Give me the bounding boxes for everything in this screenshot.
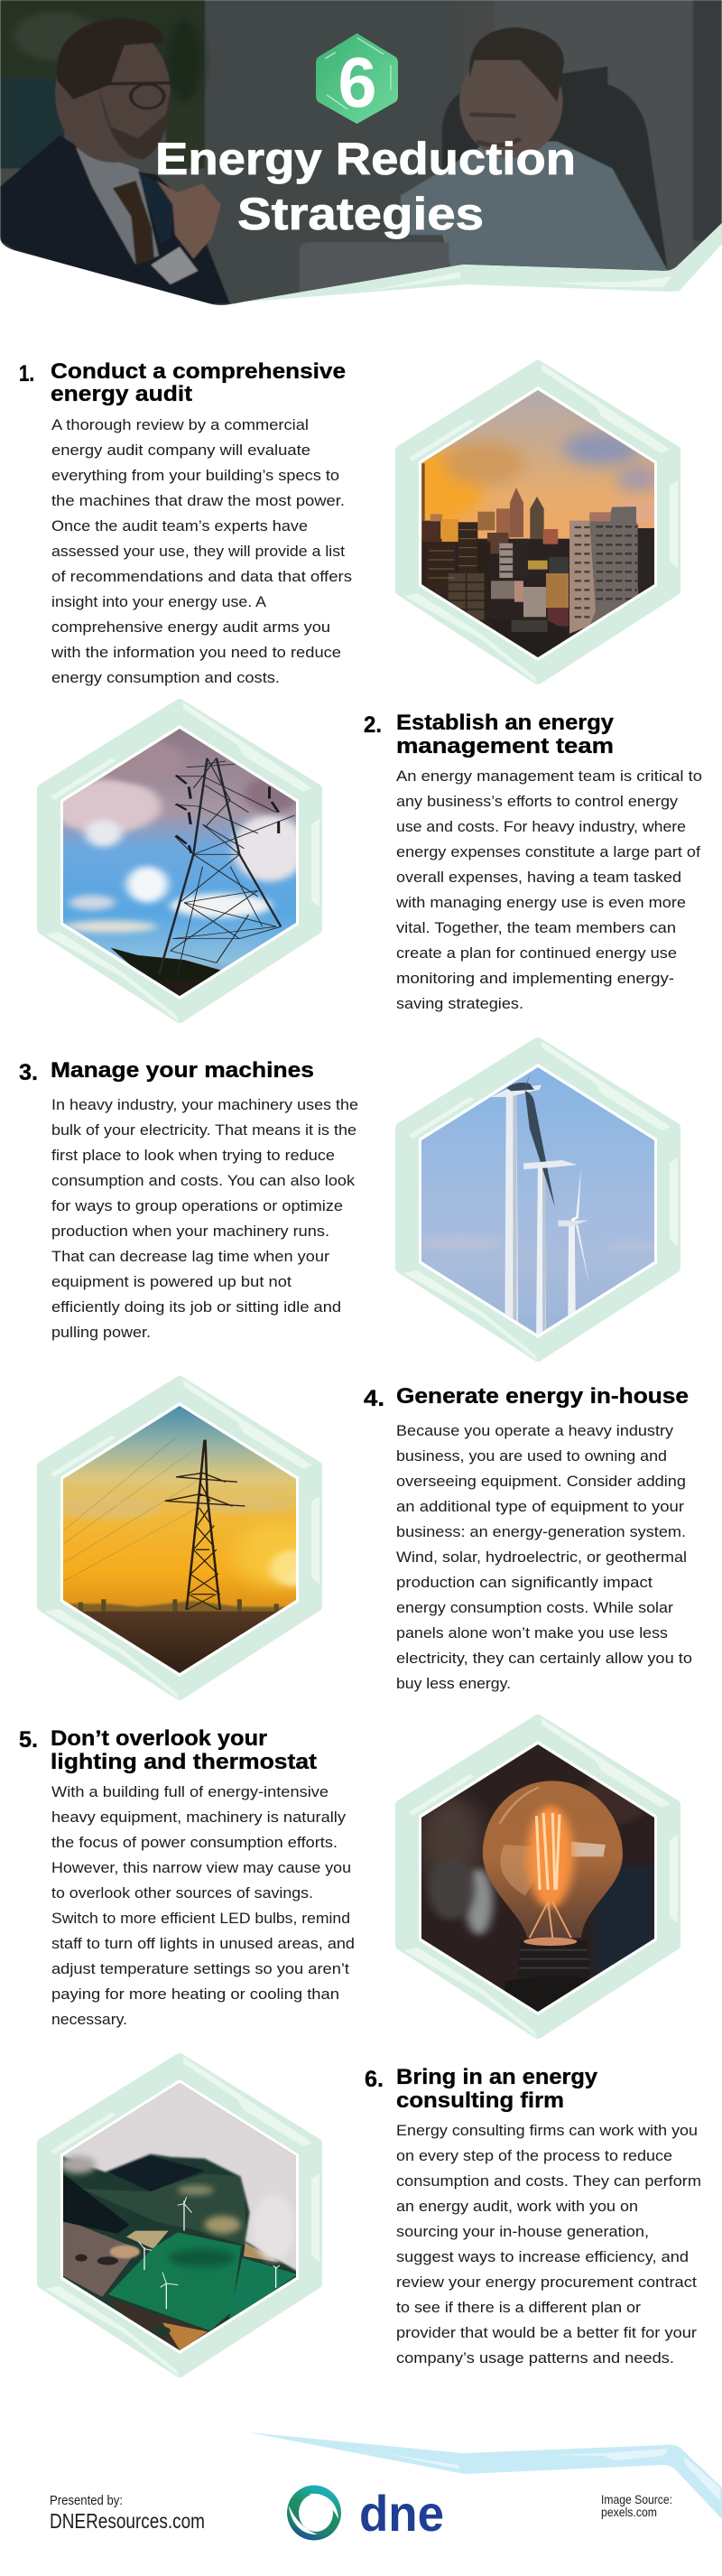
step 6 body: an energy audit, work with you on [396, 2198, 638, 2215]
step 5 body: staff to turn off lights in unused areas, and [51, 1935, 355, 1952]
step 2 body [395, 767, 702, 1012]
badge: number 6 [317, 34, 397, 123]
step 4 body: business, you are used to owning and [396, 1447, 667, 1465]
step 1 body: the machines that draw the most power. [51, 492, 345, 509]
step 5 number: 5. [19, 1727, 38, 1753]
image source: Image Source: [601, 2492, 672, 2506]
panel: step 2 text [364, 711, 702, 1012]
step 2 body: An energy management team is critical to [396, 767, 702, 785]
step 5 body: paying for more heating or cooling than [51, 1985, 339, 2003]
step 6 body [396, 2122, 701, 2367]
presented by: DNEResources.com [50, 2509, 205, 2533]
step 6 body: review your energy procurement contract [396, 2274, 697, 2291]
step 2 heading: Establish an energy [396, 711, 614, 735]
step 1 body: assessed your use, they will provide a list [51, 543, 345, 560]
step 5 body: the focus of power consumption efforts. [51, 1834, 338, 1851]
step 2 body: vital. Together, the team members can [396, 919, 676, 936]
step 4 body: Wind, solar, hydroelectric, or geothermal [396, 1548, 687, 1566]
footer blue ribbon [249, 2432, 722, 2519]
step 1 body: A thorough review by a commercial [51, 416, 309, 433]
step 3 body: equipment is powered up but not [51, 1273, 292, 1290]
step 1 body: energy audit company will evaluate [51, 442, 310, 459]
logo: dne [287, 2485, 444, 2542]
panel: step 1 text [19, 359, 352, 686]
step 4 body: overseeing equipment. Consider adding [396, 1473, 686, 1490]
step 1 heading: Conduct a comprehensive [51, 359, 346, 384]
hexagon photo: pylon at sunset [42, 1380, 320, 1699]
step 5 heading [51, 1726, 317, 1774]
step 6 body: suggest ways to increase efficiency, and [396, 2248, 689, 2265]
step 5 heading: Don’t overlook your [51, 1726, 267, 1751]
presented by: Presented by: [50, 2493, 123, 2508]
step 5 body: Switch to more efficient LED bulbs, remind [51, 1910, 350, 1927]
step 4 body: production can significantly impact [396, 1574, 653, 1591]
panel: step 3 text [19, 1058, 358, 1341]
step 3 body: That can decrease lag time when your [51, 1248, 329, 1265]
step 3 body: pulling power. [51, 1324, 151, 1341]
step 2 heading [396, 711, 614, 758]
step 6 body: company’s usage patterns and needs. [396, 2349, 674, 2367]
title: Energy Reduction [155, 134, 576, 184]
step 4 body: panels alone won’t make you use less [396, 1624, 668, 1641]
step 4 number: 4. [364, 1386, 384, 1411]
step 1 body: everything from your building’s specs to [51, 467, 339, 484]
step 1 body: of recommendations and data that offers [51, 568, 352, 585]
step 6 body: sourcing your in-house generation, [396, 2223, 649, 2240]
logo: dne: dne [359, 2485, 444, 2542]
step 4 body: an additional type of equipment to your [396, 1498, 684, 1515]
step 4 heading: Generate energy in-house [396, 1384, 689, 1409]
image source [601, 2492, 672, 2519]
step 3 body: for ways to group operations or optimize [51, 1197, 343, 1214]
presented by [50, 2493, 205, 2533]
hexagon photo: wind turbines [401, 1041, 678, 1361]
step 5 body: necessary. [51, 2011, 127, 2028]
step 1 body: energy consumption and costs. [51, 669, 280, 686]
hexagon photo: aerial wind farm under clouds [42, 2057, 319, 2376]
step 1 body: Once the audit team’s experts have [51, 517, 308, 535]
step 6 heading: consulting firm [396, 2088, 564, 2113]
step 3 heading: Manage your machines [51, 1058, 314, 1083]
image source: pexels.com [601, 2505, 657, 2519]
panel: step 6 text [365, 2065, 701, 2367]
step 1 body [51, 416, 352, 686]
step 1 number: 1. [19, 361, 34, 386]
step 1 body: comprehensive energy audit arms you [51, 618, 330, 636]
step 2 body: overall expenses, having a team tasked [396, 869, 681, 886]
panel: step 5 text [19, 1726, 355, 2028]
step 6 number: 6. [365, 2067, 384, 2092]
step 4 body: electricity, they can certainly allow you to [396, 1650, 692, 1667]
header photo: two businessmen under dark overlay [0, 0, 722, 310]
step 2 body: create a plan for continued energy use [396, 944, 677, 962]
step 2 body: monitoring and implementing energy- [396, 970, 674, 987]
step 6 heading [396, 2065, 597, 2113]
step 2 heading: management team [396, 734, 614, 758]
step 4 body: business: an energy-generation system. [396, 1523, 686, 1540]
step 6 body: provider that would be a better fit for your [396, 2324, 697, 2341]
hexagon photo: transmission tower against cloudy sky [42, 702, 319, 1022]
step 5 heading: lighting and thermostat [51, 1750, 317, 1774]
mint ribbon under header [239, 223, 722, 302]
step 3 body: In heavy industry, your machinery uses the [51, 1096, 358, 1113]
step 5 body: With a building full of energy-intensive [51, 1783, 329, 1800]
step 5 body: However, this narrow view may cause you [51, 1859, 351, 1876]
title: Strategies [237, 189, 484, 239]
step 3 body: efficiently doing its job or sitting idle and [51, 1298, 341, 1316]
step 4 body: energy consumption costs. While solar [396, 1599, 673, 1616]
title [155, 134, 576, 239]
step 2 body: with managing energy use is even more [395, 894, 686, 911]
step 5 body: to overlook other sources of savings. [51, 1884, 313, 1902]
hexagon photo: glowing light bulb [401, 1718, 678, 2038]
step 3 body [51, 1096, 358, 1341]
hexagon photo: city skyline at sunset [394, 364, 678, 684]
step 4 body [396, 1422, 692, 1692]
step 1 heading [51, 359, 346, 406]
step 2 body: use and costs. For heavy industry, where [396, 818, 686, 835]
step 6 body: Energy consulting firms can work with you [396, 2122, 698, 2139]
step 1 body: with the information you need to reduce [51, 644, 341, 661]
step 6 body: on every step of the process to reduce [396, 2147, 672, 2164]
step 4 body: Because you operate a heavy industry [396, 1422, 674, 1439]
step 3 body: first place to look when trying to reduce [51, 1147, 335, 1164]
panel: step 4 text [364, 1384, 692, 1692]
step 2 body: saving strategies. [396, 995, 523, 1012]
step 3 body: consumption and costs. You can also look [51, 1172, 356, 1189]
step 2 body: energy expenses constitute a large part of [396, 843, 700, 860]
badge: number 6: 6 [338, 42, 377, 122]
step 3 body: production when your machinery runs. [51, 1223, 329, 1240]
step 6 body: to see if there is a different plan or [396, 2299, 641, 2316]
step 5 body: heavy equipment, machinery is naturally [51, 1809, 347, 1826]
step 2 body: any business’s efforts to control energy [396, 793, 679, 810]
step 3 number: 3. [19, 1060, 38, 1085]
step 6 heading: Bring in an energy [396, 2065, 597, 2089]
step 5 body: adjust temperature settings so you aren’t [51, 1960, 349, 1977]
step 5 body [51, 1783, 355, 2028]
step 4 body: buy less energy. [396, 1675, 511, 1692]
step 3 body: bulk of your electricity. That means it is the [51, 1121, 356, 1139]
step 1 heading: energy audit [51, 382, 192, 406]
step 6 body: consumption and costs. They can perform [396, 2172, 701, 2190]
step 2 number: 2. [364, 712, 382, 738]
step 1 body: insight into your energy use. A [51, 593, 267, 610]
